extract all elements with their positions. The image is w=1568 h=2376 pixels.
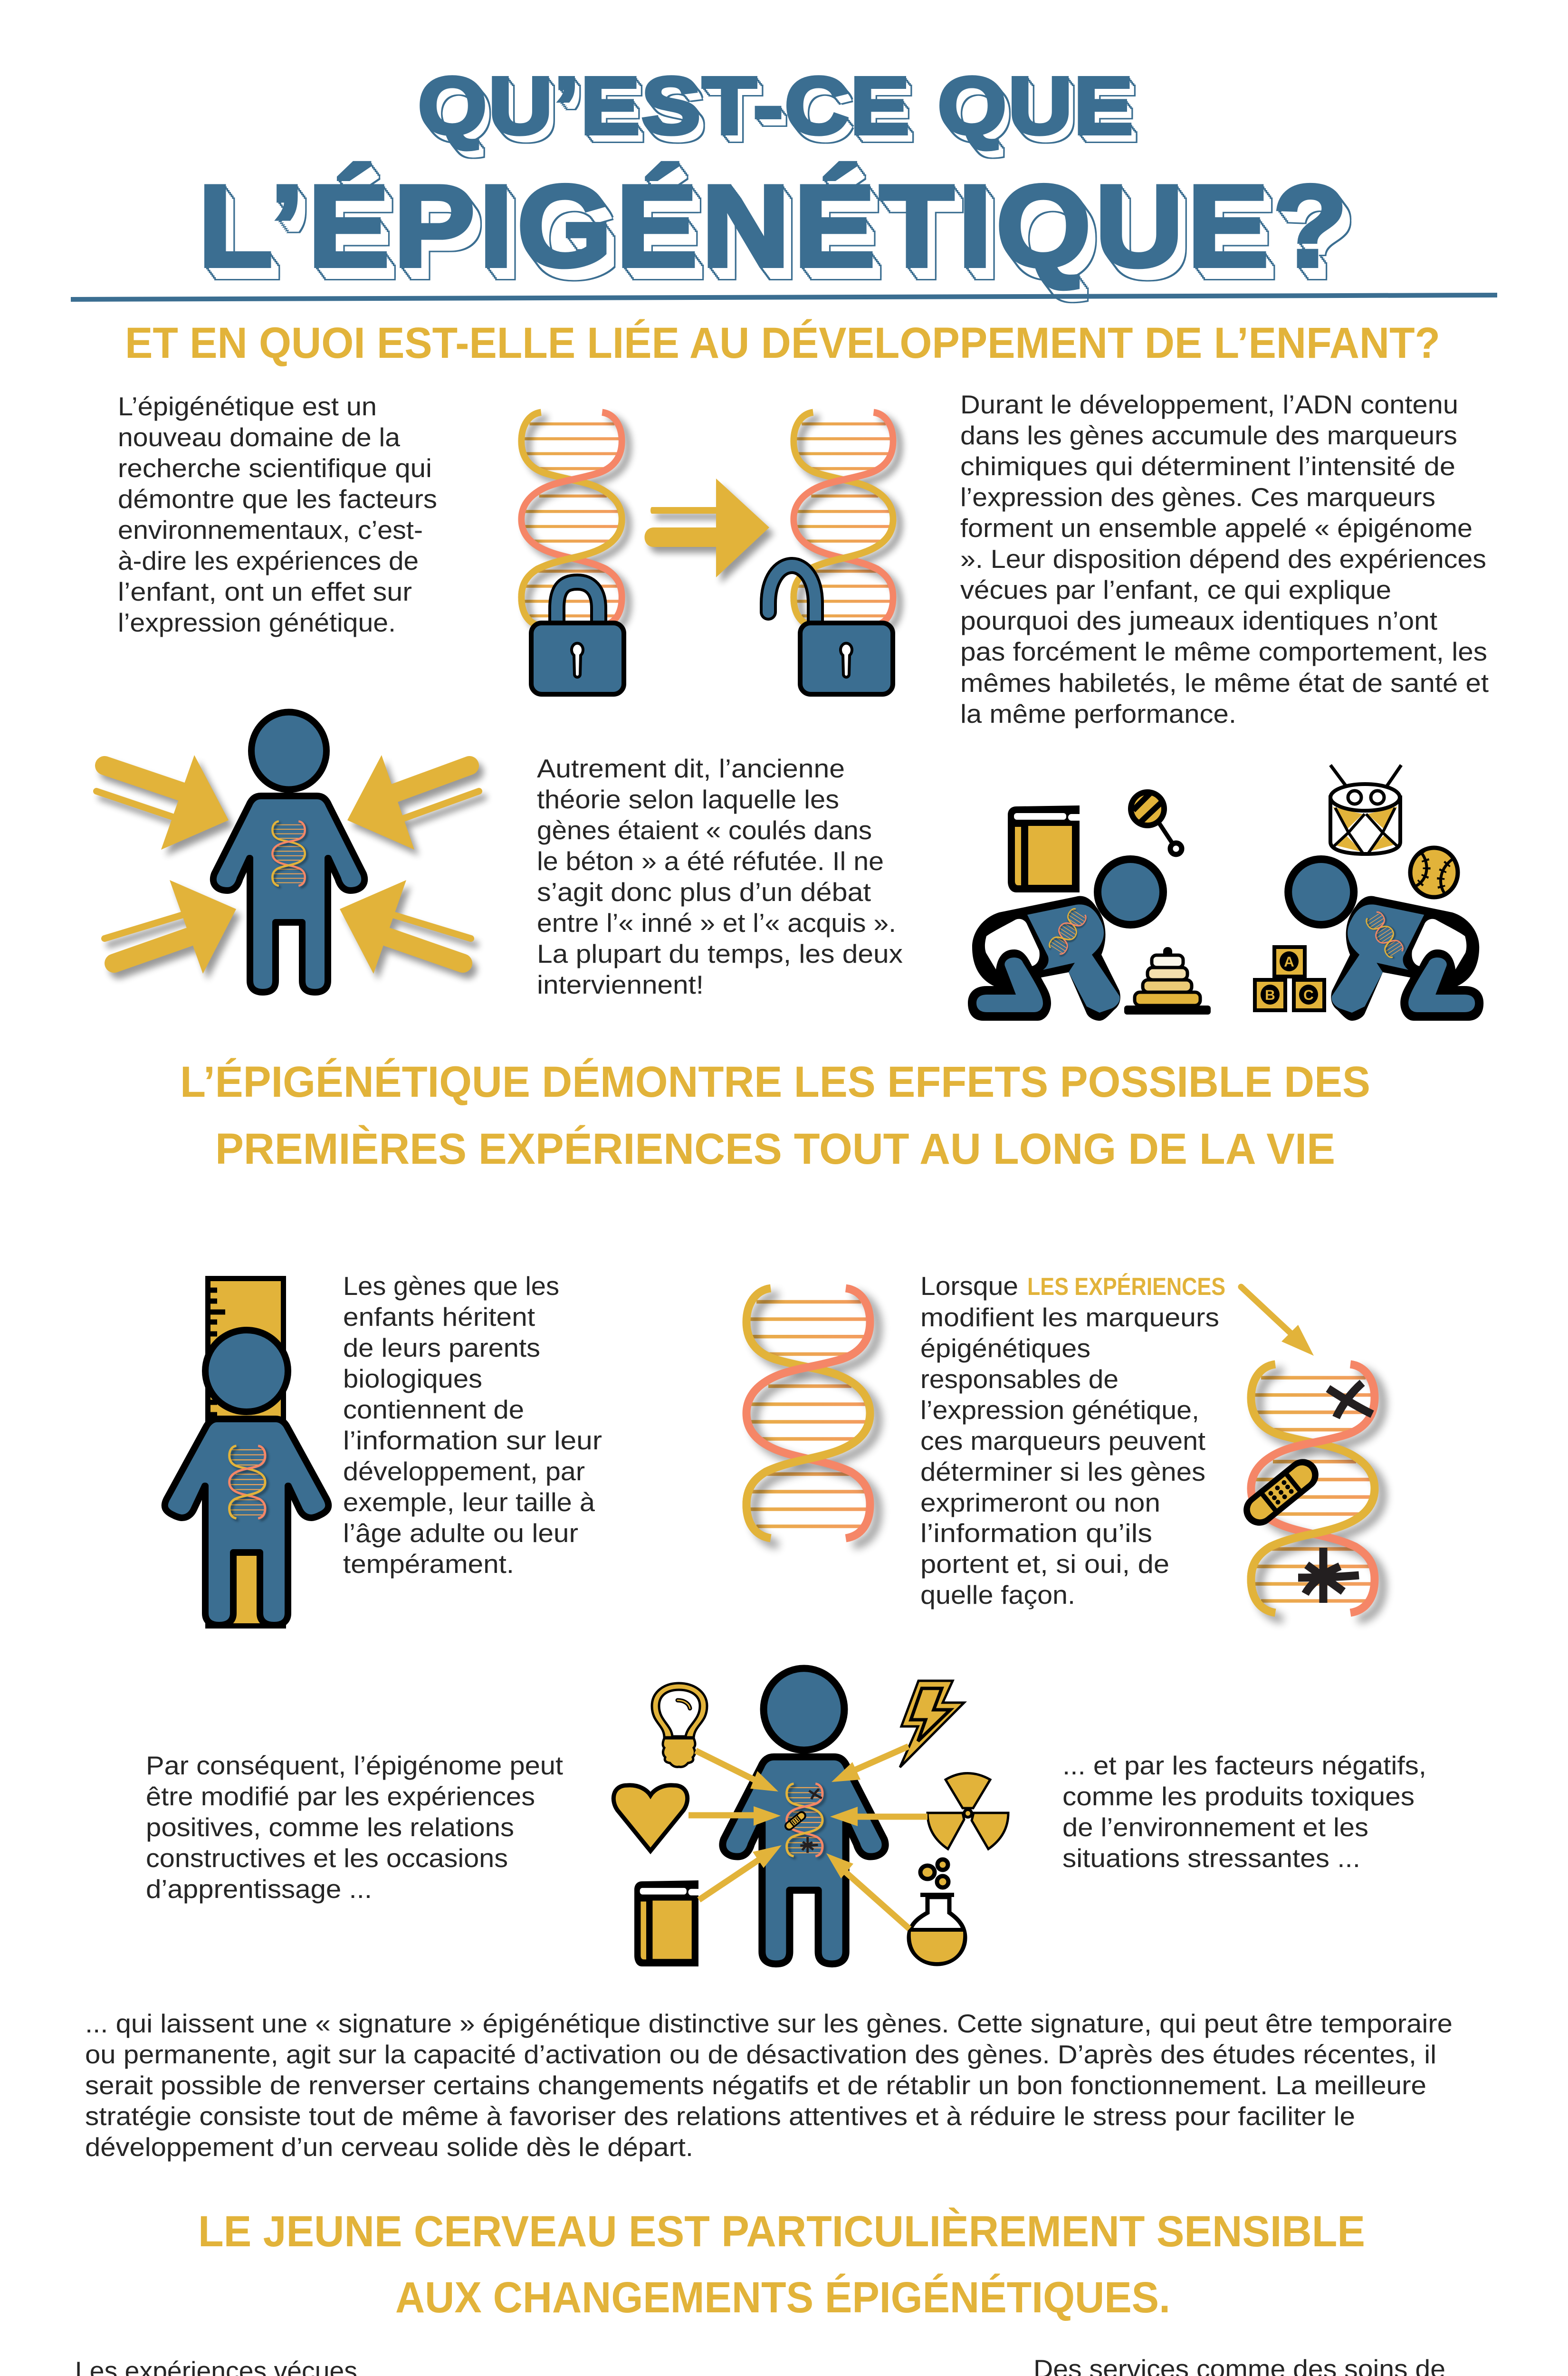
heading: jeune cerveau: AUX CHANGEMENTS ÉPIGÉNÉTIQUES.	[395, 2273, 1170, 2322]
book	[1008, 805, 1080, 892]
text block: intro left: l’expression génétique.	[118, 608, 396, 637]
text block: intro left: L’épigénétique est un	[118, 392, 377, 421]
rattle	[1131, 791, 1182, 854]
title underline rule	[71, 293, 1497, 302]
arrow upper right	[347, 755, 479, 850]
text block: intro right: vécues par l’enfant, ce qui explique	[960, 575, 1391, 604]
alphabet blocks: C	[1303, 987, 1314, 1003]
text block: intro left: environnementaux, c’est-	[118, 515, 423, 545]
text block: par conséquent: d’apprentissage ...	[146, 1874, 372, 1904]
text block: lorsque les expériences: l’expression génétique,	[920, 1395, 1199, 1425]
text block: intro right: mêmes habiletés, le même état de santé et	[960, 668, 1489, 698]
heading: jeune cerveau	[198, 2207, 1365, 2322]
text block: intro left	[118, 392, 437, 637]
open padlock	[768, 565, 893, 694]
text block: intro right: Durant le développement, l’ADN contenu	[960, 390, 1458, 419]
text block: signature paragraph: stratégie consiste tout de même à favoriser des relations attentives et à réduire le stress pour faciliter le	[85, 2101, 1355, 2131]
text block: par conséquent	[146, 1751, 563, 1904]
text block: lorsque les expériences	[920, 1271, 1225, 1610]
arrow: experiences to DNA	[1241, 1287, 1314, 1356]
icon: person with inward arrows	[96, 712, 479, 992]
text block: lorsque les expériences: exprimeront ou non	[920, 1488, 1160, 1517]
text block: autrement dit: Autrement dit, l’ancienne	[537, 754, 845, 783]
baby right DNA	[1365, 910, 1405, 959]
ruler	[208, 1278, 283, 1626]
person figure	[213, 712, 364, 992]
full page illustration and text canvas	[71, 293, 1497, 2376]
text block: par conséquent: Par conséquent, l’épigénome peut	[146, 1751, 563, 1780]
text block: signature paragraph: ... qui laissent une « signature » épigénétique distinctive sur les gènes. Cette signature, qui peut être temporaire	[85, 2009, 1453, 2038]
baseball	[1410, 848, 1458, 897]
factor arrows	[688, 1746, 927, 1929]
chest DNA with marks	[783, 1784, 822, 1856]
baby left DNA	[1048, 907, 1088, 956]
alphabet blocks	[1255, 947, 1324, 1010]
text block: intro right: pas forcément le même comportement, les	[960, 637, 1487, 666]
closed padlock	[531, 582, 624, 694]
text block: lorsque les expériences: portent et, si oui, de	[920, 1549, 1169, 1579]
text block: intro left: recherche scientifique qui	[118, 453, 432, 483]
arrow lower left	[105, 880, 236, 974]
text block: autrement dit: théorie selon laquelle les	[537, 785, 839, 814]
text block: autrement dit: s’agit donc plus d’un débat	[537, 877, 871, 907]
alphabet blocks: B	[1265, 987, 1275, 1003]
text block: signature paragraph: développement d’un cerveau solide dès le départ.	[85, 2132, 693, 2162]
heart	[613, 1785, 688, 1851]
chest DNA	[229, 1446, 265, 1518]
text block: autrement dit: La plupart du temps, les deux	[537, 939, 903, 968]
text block: les gènes: exemple, leur taille à	[343, 1487, 595, 1517]
text block: par conséquent: constructives et les occasions	[146, 1843, 508, 1873]
text block: les gènes	[343, 1271, 602, 1579]
title: main heading	[198, 59, 1372, 283]
text block: les gènes: Les gènes que les	[343, 1271, 559, 1301]
text block: intro right: ». Leur disposition dépend des expériences	[960, 544, 1486, 574]
heading: effets possibles: L’ÉPIGÉNÉTIQUE DÉMONTRE LES EFFETS POSSIBLE DES	[180, 1057, 1370, 1106]
baby right	[1288, 859, 1483, 1021]
child figure	[165, 1330, 328, 1625]
text block: intro right: l’expression des gènes. Ces marqueurs	[960, 482, 1435, 512]
text block: autrement dit: entre l’« inné » et l’« acquis ».	[537, 908, 896, 938]
person figure	[723, 1668, 885, 1964]
text block: signature paragraph	[85, 2009, 1453, 2162]
text block: facteurs négatifs: ... et par les facteurs négatifs,	[1062, 1751, 1426, 1780]
text block: lorsque les expériences: LES EXPÉRIENCES	[1027, 1273, 1225, 1301]
stacking rings	[1124, 947, 1211, 1015]
baby left	[968, 859, 1163, 1021]
text block: les gènes: l’âge adulte ou leur	[343, 1518, 578, 1548]
heading: et en quoi: ET EN QUOI EST-ELLE LIÉE AU DÉVELOPPEMENT DE L’ENFANT?	[125, 318, 1440, 367]
text block: intro right: forment un ensemble appelé « épigénome	[960, 513, 1472, 543]
text block: autrement dit: interviennent!	[537, 970, 704, 999]
heading: effets possibles	[180, 1057, 1370, 1173]
icon: child with ruler	[165, 1278, 328, 1626]
text block: les gènes: l’information sur leur	[343, 1426, 602, 1455]
dna left	[521, 412, 622, 626]
title line 2: L’ÉPIGÉNÉTIQUE?	[198, 161, 1351, 291]
heading: jeune cerveau: LE JEUNE CERVEAU EST PARTICULIÈREMENT SENSIBLE	[198, 2207, 1365, 2256]
text block: les gènes: enfants héritent	[343, 1302, 535, 1332]
heading: effets possibles: PREMIÈRES EXPÉRIENCES TOUT AU LONG DE LA VIE	[215, 1124, 1335, 1173]
text block: les gènes: développement, par	[343, 1456, 585, 1486]
text block: intro right: la même performance.	[960, 699, 1236, 728]
text block: les gènes: tempérament.	[343, 1549, 514, 1579]
text block: intro right: chimiques qui déterminent l’intensité de	[960, 451, 1455, 481]
text block: lorsque les expériences: épigénétiques	[920, 1333, 1090, 1363]
icon: DNA with marks	[1237, 1364, 1375, 1613]
alphabet blocks: A	[1284, 954, 1294, 970]
text block: lorsque les expériences: ces marqueurs peuvent	[920, 1426, 1205, 1456]
text block: facteurs négatifs: situations stressantes ...	[1062, 1843, 1360, 1873]
drum	[1330, 765, 1401, 854]
text block: les gènes: biologiques	[343, 1364, 482, 1393]
text block: signature paragraph: ou permanente, agit sur la capacité d’activation ou de désactivation des gènes. D’après des études récentes, il	[85, 2040, 1436, 2069]
text block: lorsque les expériences: responsables de	[920, 1364, 1119, 1394]
text block: autrement dit: gènes étaient « coulés dans	[537, 815, 872, 845]
text block: facteurs négatifs	[1062, 1751, 1426, 1873]
arrow upper left	[96, 755, 229, 850]
text block: facteurs négatifs: de l’environnement et les	[1062, 1812, 1368, 1842]
text block: intro right: dans les gènes accumule des marqueurs	[960, 421, 1457, 450]
text block: facteurs négatifs: comme les produits toxiques	[1062, 1782, 1415, 1811]
text block: intro right	[960, 390, 1489, 728]
text block: intro left: nouveau domaine de la	[118, 422, 400, 452]
text block: les gènes: contiennent de	[343, 1395, 524, 1424]
chest DNA	[272, 821, 305, 886]
arrow lower right	[340, 880, 471, 974]
flask	[909, 1859, 965, 1964]
text block: intro left: à-dire les expériences de	[118, 546, 419, 575]
dna right	[794, 412, 893, 626]
text block: intro left: démontre que les facteurs	[118, 484, 437, 514]
icon: plain DNA	[746, 1288, 870, 1538]
text block: autrement dit	[537, 754, 903, 999]
text block: par conséquent: être modifié par les expériences	[146, 1782, 535, 1811]
title line 1: QU’EST-CE QUE	[418, 61, 1135, 151]
text block: lorsque les expériences: Lorsque	[920, 1271, 1018, 1301]
text block: lorsque les expériences: modifient les marqueurs	[920, 1303, 1219, 1332]
text block: par conséquent: positives, comme les relations	[146, 1812, 514, 1842]
text block: signature paragraph: serait possible de renverser certains changements négatifs et de rétablir un bon fonctionnement. La meilleure	[85, 2070, 1426, 2100]
radiation symbol	[927, 1773, 1008, 1849]
text block: lorsque les expériences: l’information qu’ils	[920, 1518, 1152, 1548]
light bulb	[652, 1683, 707, 1767]
icon: locked and unlocked DNA with arrow	[521, 412, 893, 694]
text block: les gènes: de leurs parents	[343, 1333, 540, 1362]
text block: lorsque les expériences: quelle façon.	[920, 1580, 1075, 1610]
text block: lorsque les expériences: déterminer si les gènes	[920, 1457, 1205, 1486]
text block: intro left: l’enfant, ont un effet sur	[118, 577, 412, 606]
text block: intro right: pourquoi des jumeaux identiques n’ont	[960, 606, 1437, 635]
book	[634, 1880, 698, 1966]
lightning bolt	[900, 1681, 964, 1767]
icon: person with factors	[613, 1668, 1008, 1966]
text block: autrement dit: le béton » a été réfutée. Il ne	[537, 846, 884, 876]
icon: babies with toys	[968, 765, 1483, 1021]
arrow	[644, 479, 769, 577]
